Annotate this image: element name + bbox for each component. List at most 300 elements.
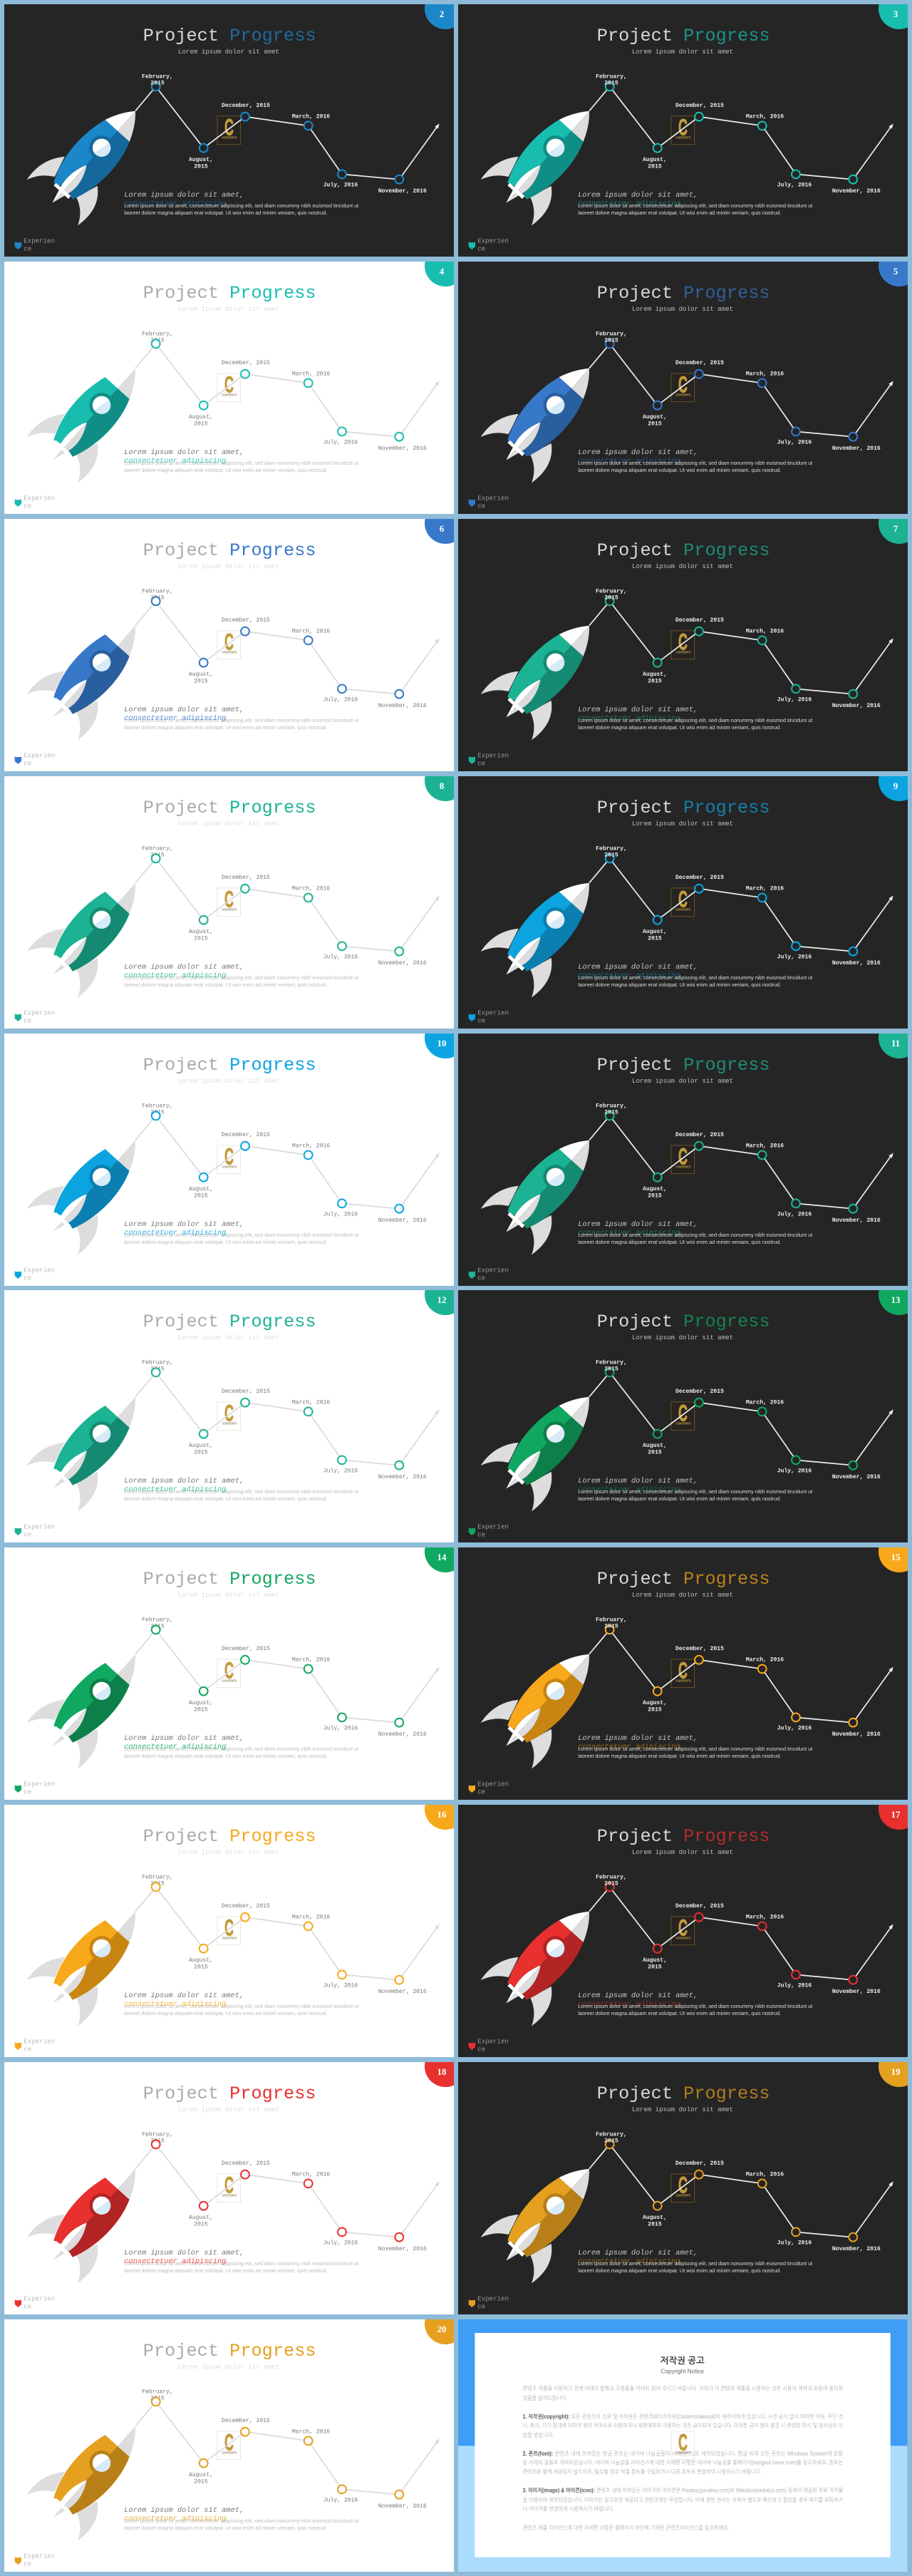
timeline labels: August,	[189, 2215, 213, 2221]
timeline labels: November, 2016	[378, 1217, 427, 1224]
watermark logo: CONTENTS	[222, 136, 237, 140]
timeline line chart	[589, 854, 893, 955]
rocket	[27, 882, 135, 997]
timeline line chart	[589, 2140, 893, 2241]
callout text: Lorem ipsum dolor sit amet,	[124, 1992, 244, 2000]
title: Project Progress	[597, 26, 770, 46]
timeline labels: August,	[643, 1443, 667, 1449]
watermark logo: C	[224, 886, 234, 912]
timeline labels: February,	[596, 331, 627, 338]
timeline labels: March, 2016	[746, 114, 784, 120]
watermark logo: C	[678, 2429, 688, 2455]
callout text: laoreet dolore magna aliquam erat volutpat. Ut wisi enim ad minim veniam, quis nostrud.	[579, 983, 782, 988]
subtitle: Lorem ipsum dolor sit amet	[632, 305, 733, 313]
timeline labels: February,	[596, 1103, 627, 1109]
rocket	[27, 1654, 135, 1768]
callout text	[124, 1734, 358, 1759]
callout text	[124, 1992, 358, 2016]
footer label	[24, 1781, 55, 1796]
callout text: Lorem ipsum dolor sit amet,	[124, 2505, 244, 2514]
timeline labels: March, 2016	[292, 1914, 330, 1920]
watermark logo: C	[224, 2172, 234, 2198]
callout text: consectetuer adipiscing	[579, 200, 680, 208]
subtitle: Lorem ipsum dolor sit amet	[632, 820, 733, 828]
timeline labels: December, 2015	[222, 1903, 270, 1910]
timeline labels: November, 2016	[378, 445, 427, 452]
callout text	[124, 1477, 358, 1502]
watermark logo: CONTENTS	[676, 136, 691, 140]
callout text: Lorem ipsum dolor sit amet,	[579, 1220, 698, 1228]
callout text: consectetuer adipiscing	[579, 457, 680, 465]
page badge: 2	[440, 9, 444, 19]
footer label: ce	[478, 759, 486, 767]
notice section 1	[523, 2413, 844, 2438]
timeline labels: July, 2016	[777, 1983, 812, 1989]
timeline labels: November, 2016	[832, 445, 881, 452]
timeline labels: February,	[596, 2131, 627, 2138]
page badge	[879, 0, 912, 29]
icon: shield	[15, 2299, 21, 2307]
timeline line chart	[589, 1369, 893, 1470]
icon: shield	[15, 1786, 21, 1793]
timeline labels	[596, 74, 881, 195]
page badge	[879, 760, 912, 801]
watermark logo: C	[224, 1915, 234, 1941]
timeline labels: August,	[643, 414, 667, 421]
timeline labels: December, 2015	[222, 1646, 270, 1652]
timeline line chart	[135, 1626, 440, 1727]
footer label: Experien	[24, 2552, 55, 2560]
page badge	[425, 1531, 466, 1572]
footer label	[24, 2552, 55, 2567]
footer label	[478, 1266, 509, 1282]
timeline line chart	[589, 1111, 893, 1212]
callout text: consectetuer adipiscing	[124, 457, 226, 465]
watermark logo	[671, 1658, 695, 1688]
timeline labels: July, 2016	[323, 1211, 358, 1217]
title: Project Progress	[143, 540, 316, 561]
timeline labels: 2015	[605, 2138, 618, 2144]
timeline line chart	[589, 340, 893, 441]
icon: shield	[15, 500, 21, 507]
footer label	[478, 1523, 509, 1539]
callout text: consectetuer adipiscing	[124, 1229, 226, 1237]
notice section 2: 2. 폰트(font): 콘텐츠 내에 쓰여있는 한글 폰트는 네이버 나눔글꼴의 서체(폰트)로 제작되었습니다. 한글 외의 모든 폰트는 Windows System에 포함	[523, 2450, 844, 2456]
timeline labels: February,	[142, 589, 173, 595]
callout text: Lorem ipsum dolor sit amet, consectetuer adipiscing elit, sed diam nonummy nibh euismod tincidunt ut	[579, 204, 813, 209]
watermark logo: CONTENTS	[222, 650, 237, 654]
page badge: 3	[893, 9, 898, 19]
timeline labels: December, 2015	[675, 1646, 724, 1652]
rocket	[481, 1140, 589, 1254]
timeline labels: August,	[189, 414, 213, 421]
watermark logo	[671, 2172, 695, 2202]
callout text	[579, 1477, 813, 1502]
timeline labels: December, 2015	[675, 617, 724, 624]
timeline labels: December, 2015	[222, 360, 270, 366]
callout text: consectetuer adipiscing	[579, 1229, 680, 1237]
callout text: consectetuer adipiscing	[124, 200, 226, 208]
icon: shield	[469, 500, 475, 507]
page badge	[425, 1788, 466, 1830]
timeline labels: February,	[142, 2389, 173, 2395]
footer label: ce	[24, 2560, 31, 2567]
panel: copyright notice	[458, 2319, 908, 2572]
subtitle: Lorem ipsum dolor sit amet	[178, 1848, 279, 1856]
page badge: 18	[437, 2066, 447, 2077]
callout text	[579, 706, 813, 731]
timeline labels: August,	[189, 1957, 213, 1964]
timeline line chart	[135, 2397, 440, 2498]
timeline labels: February,	[142, 1103, 173, 1109]
timeline labels: 2015	[194, 1964, 208, 1970]
rocket	[481, 882, 589, 997]
timeline labels	[142, 2389, 427, 2510]
footer label	[478, 751, 509, 767]
timeline labels: July, 2016	[777, 1468, 812, 1475]
timeline labels: 2015	[648, 678, 662, 684]
subtitle: Lorem ipsum dolor sit amet	[178, 820, 279, 828]
watermark logo: C	[678, 2172, 688, 2198]
timeline labels	[142, 1875, 427, 1995]
timeline labels: August,	[189, 2472, 213, 2478]
timeline labels: 2015	[605, 1109, 618, 1116]
callout text: Lorem ipsum dolor sit amet,	[124, 2249, 244, 2257]
footer label	[24, 1523, 55, 1539]
timeline line chart	[589, 83, 893, 184]
watermark logo	[671, 372, 695, 402]
subtitle: Lorem ipsum dolor sit amet	[178, 1591, 279, 1599]
timeline labels: 2015	[194, 1192, 208, 1199]
watermark logo: CONTENTS	[676, 1165, 691, 1168]
timeline labels: November, 2016	[832, 703, 881, 709]
timeline labels: March, 2016	[292, 371, 330, 377]
title: Project Progress	[597, 1054, 770, 1075]
callout text: Lorem ipsum dolor sit amet,	[579, 1992, 698, 2000]
footer label: Experien	[24, 1781, 55, 1788]
timeline line chart	[135, 1369, 440, 1470]
timeline labels: 2015	[605, 81, 618, 87]
notice section 2: 된 서체의 글꼴로 제작되었습니다. 네이버 나눔글꼴 라이선스에 대한 자세한 사항은 네이버 나눔글꼴 홈페이지(hangeul.naver.com)를 참조하세요. 폰트는	[523, 2459, 844, 2466]
footer label	[24, 1266, 55, 1282]
callout text: laoreet dolore magna aliquam erat volutpat. Ut wisi enim ad minim veniam, quis nostrud.	[124, 2011, 327, 2016]
callout text: Lorem ipsum dolor sit amet, consectetuer adipiscing elit, sed diam nonummy nibh euismod tincidunt ut	[124, 1747, 358, 1752]
callout text: Lorem ipsum dolor sit amet,	[124, 1220, 244, 1228]
callout text: Lorem ipsum dolor sit amet, consectetuer adipiscing elit, sed diam nonummy nibh euismod tincidunt ut	[124, 2004, 358, 2009]
timeline labels: February,	[596, 845, 627, 852]
callout text	[579, 1220, 813, 1245]
callout text: laoreet dolore magna aliquam erat volutpat. Ut wisi enim ad minim veniam, quis nostrud.	[124, 468, 327, 473]
callout text	[579, 448, 813, 473]
notice title: Copyright Notice	[661, 2368, 705, 2374]
timeline labels: 2015	[648, 1450, 662, 1456]
callout text: laoreet dolore magna aliquam erat volutpat. Ut wisi enim ad minim veniam, quis nostrud.	[124, 1754, 327, 1759]
callout text: consectetuer adipiscing	[124, 714, 226, 723]
timeline labels: 2015	[194, 164, 208, 170]
footer label: Experien	[24, 2037, 55, 2045]
page badge: 20	[437, 2323, 446, 2334]
panel: slide 16	[4, 1805, 453, 2057]
timeline labels: February,	[142, 845, 173, 852]
rocket	[27, 626, 135, 740]
timeline labels: February,	[596, 1875, 627, 1881]
callout text: laoreet dolore magna aliquam erat volutpat. Ut wisi enim ad minim veniam, quis nostrud.	[579, 1754, 782, 1759]
timeline labels	[596, 1360, 881, 1480]
callout text	[579, 191, 813, 216]
rocket	[27, 369, 135, 483]
footer label: ce	[478, 1531, 486, 1539]
panel: slide 11	[458, 1034, 908, 1286]
page badge	[425, 245, 466, 287]
timeline labels: November, 2016	[378, 2246, 427, 2252]
panel: slide 12	[4, 1290, 453, 1542]
icon: shield	[469, 2042, 475, 2050]
watermark logo	[217, 629, 241, 659]
page badge: 16	[437, 1809, 447, 1820]
watermark logo	[671, 1915, 695, 1945]
footer label: ce	[478, 245, 486, 253]
timeline labels: July, 2016	[323, 2497, 358, 2503]
timeline labels: December, 2015	[222, 875, 270, 881]
watermark logo	[217, 372, 241, 402]
icon: shield	[469, 1271, 475, 1278]
footer label: ce	[478, 2045, 486, 2053]
timeline labels: 2015	[150, 1624, 165, 1630]
watermark logo: CONTENTS	[676, 650, 691, 654]
callout text: Lorem ipsum dolor sit amet,	[124, 963, 244, 972]
timeline labels: July, 2016	[323, 182, 358, 189]
callout text: laoreet dolore magna aliquam erat volutpat. Ut wisi enim ad minim veniam, quis nostrud.	[579, 1240, 782, 1245]
page badge	[425, 1274, 466, 1315]
footer label: ce	[24, 1274, 31, 1282]
rocket	[481, 626, 589, 740]
icon: shield	[469, 1014, 475, 1021]
title: Project Progress	[143, 2340, 316, 2361]
rocket	[27, 1912, 135, 2026]
page badge: 17	[891, 1809, 901, 1820]
callout text: Lorem ipsum dolor sit amet,	[579, 448, 698, 457]
page badge	[879, 1788, 912, 1830]
watermark logo	[217, 1143, 241, 1173]
footer label: ce	[478, 1016, 486, 1024]
timeline labels: March, 2016	[746, 628, 784, 634]
callout text: Lorem ipsum dolor sit amet, consectetuer adipiscing elit, sed diam nonummy nibh euismod tincidunt ut	[579, 1747, 813, 1752]
page badge: 4	[440, 266, 445, 277]
callout text: Lorem ipsum dolor sit amet,	[124, 1477, 244, 1485]
notice closing line: 콘텐츠 제품 라이선스에 대한 자세한 사항은 홈페이지 하단에 기재된 콘텐츠라이선스를 참조하세요.	[523, 2524, 730, 2530]
panel: slide 6	[4, 519, 453, 771]
timeline labels: February,	[142, 1875, 173, 1881]
callout text: laoreet dolore magna aliquam erat volutpat. Ut wisi enim ad minim veniam, quis nostrud.	[124, 211, 327, 216]
callout text: consectetuer adipiscing	[124, 2515, 226, 2523]
icon: shield	[15, 2557, 21, 2564]
footer label: ce	[478, 503, 486, 510]
callout text: consectetuer adipiscing	[579, 2000, 680, 2009]
page badge: 6	[440, 523, 445, 534]
rocket	[481, 1912, 589, 2026]
watermark logo: CONTENTS	[222, 2193, 237, 2197]
subtitle: Lorem ipsum dolor sit amet	[632, 1076, 733, 1084]
notice intro: 셨음을 알려드립니다.	[523, 2394, 568, 2401]
subtitle: Lorem ipsum dolor sit amet	[178, 1076, 279, 1084]
timeline labels: February,	[142, 1617, 173, 1624]
watermark logo	[671, 115, 695, 145]
watermark logo: CONTENTS	[222, 1422, 237, 1426]
callout text	[124, 963, 358, 988]
timeline labels: November, 2016	[832, 1217, 881, 1224]
watermark logo	[217, 1658, 241, 1688]
timeline labels: November, 2016	[378, 2503, 427, 2510]
callout text: consectetuer adipiscing	[579, 714, 680, 723]
callout text: Lorem ipsum dolor sit amet,	[579, 963, 698, 972]
watermark logo	[217, 1915, 241, 1945]
timeline labels: August,	[189, 1186, 213, 1192]
callout text: laoreet dolore magna aliquam erat volutpat. Ut wisi enim ad minim veniam, quis nostrud.	[579, 1497, 782, 1502]
icon: shield	[15, 242, 21, 249]
timeline line chart	[589, 1626, 893, 1727]
callout text: Lorem ipsum dolor sit amet,	[579, 191, 698, 200]
footer label: ce	[478, 2302, 486, 2310]
timeline labels: July, 2016	[323, 2240, 358, 2246]
timeline line chart	[589, 597, 893, 698]
timeline labels: November, 2016	[378, 1474, 427, 1480]
timeline labels: February,	[142, 74, 173, 81]
page badge: 12	[437, 1294, 446, 1305]
timeline labels: 2015	[648, 1192, 662, 1199]
callout text: laoreet dolore magna aliquam erat volutpat. Ut wisi enim ad minim veniam, quis nostrud.	[124, 726, 327, 731]
timeline labels: 2015	[648, 2221, 662, 2227]
timeline labels: December, 2015	[222, 2418, 270, 2424]
timeline line chart	[135, 1111, 440, 1212]
timeline labels: 2015	[605, 1624, 618, 1630]
watermark logo: C	[678, 1143, 688, 1169]
callout text: Lorem ipsum dolor sit amet, consectetuer adipiscing elit, sed diam nonummy nibh euismod tincidunt ut	[124, 461, 358, 466]
page badge: 15	[891, 1552, 901, 1562]
timeline labels	[142, 1617, 427, 1738]
watermark logo: C	[224, 1143, 234, 1169]
timeline labels: July, 2016	[777, 697, 812, 704]
rocket	[481, 369, 589, 483]
timeline labels: August,	[189, 1443, 213, 1449]
title: Project Progress	[143, 283, 316, 304]
page badge	[879, 2046, 912, 2087]
page badge	[879, 1274, 912, 1315]
footer label: Experien	[478, 1266, 509, 1274]
timeline labels	[596, 2131, 881, 2252]
callout text: Lorem ipsum dolor sit amet, consectetuer adipiscing elit, sed diam nonummy nibh euismod tincidunt ut	[579, 718, 813, 723]
timeline labels: March, 2016	[746, 1657, 784, 1663]
page badge: 13	[891, 1294, 901, 1305]
callout text: Lorem ipsum dolor sit amet, consectetuer adipiscing elit, sed diam nonummy nibh euismod tincidunt ut	[579, 976, 813, 981]
timeline labels: February,	[142, 1360, 173, 1366]
timeline line chart	[589, 1882, 893, 1984]
callout text: Lorem ipsum dolor sit amet,	[579, 1477, 698, 1485]
panel: slide 7	[458, 519, 908, 771]
panel: slide 15	[458, 1547, 908, 1800]
subtitle: Lorem ipsum dolor sit amet	[632, 1591, 733, 1599]
timeline labels: December, 2015	[222, 1389, 270, 1395]
icon: shield	[15, 756, 21, 764]
timeline labels: November, 2016	[832, 1474, 881, 1480]
watermark logo	[217, 1401, 241, 1431]
page badge	[425, 503, 466, 544]
callout text: laoreet dolore magna aliquam erat volutpat. Ut wisi enim ad minim veniam, quis nostrud.	[124, 2525, 327, 2530]
page badge: 10	[437, 1037, 446, 1048]
footer label: Experien	[24, 237, 55, 245]
callout text: consectetuer adipiscing	[124, 2000, 226, 2009]
timeline labels: July, 2016	[323, 440, 358, 446]
timeline labels: November, 2016	[832, 1989, 881, 1995]
callout text: consectetuer adipiscing	[124, 1485, 226, 1494]
timeline labels: July, 2016	[323, 697, 358, 704]
page badge	[879, 245, 912, 287]
callout text: consectetuer adipiscing	[579, 972, 680, 980]
timeline labels: 2015	[150, 1109, 165, 1116]
timeline labels: 2015	[150, 2138, 165, 2144]
callout text: Lorem ipsum dolor sit amet,	[124, 706, 244, 714]
timeline line chart	[135, 854, 440, 955]
page badge	[879, 503, 912, 544]
timeline labels: July, 2016	[323, 1983, 358, 1989]
title: Project Progress	[597, 1312, 770, 1332]
timeline labels	[142, 845, 427, 967]
title: Project Progress	[597, 1826, 770, 1847]
callout text: Lorem ipsum dolor sit amet, consectetuer adipiscing elit, sed diam nonummy nibh euismod tincidunt ut	[124, 204, 358, 209]
footer label	[478, 1009, 509, 1024]
page badge: 14	[437, 1552, 447, 1562]
timeline labels: March, 2016	[292, 2171, 330, 2178]
notice title: 저작권 공고	[660, 2355, 705, 2365]
timeline labels: December, 2015	[222, 2160, 270, 2167]
page badge	[425, 0, 466, 29]
title: Project Progress	[143, 798, 316, 818]
callout text: consectetuer adipiscing	[579, 1743, 680, 1751]
page badge	[425, 1017, 466, 1058]
timeline labels: December, 2015	[675, 360, 724, 366]
timeline labels: July, 2016	[777, 440, 812, 446]
title: Project Progress	[597, 798, 770, 818]
footer label: ce	[24, 503, 31, 510]
footer label: Experien	[478, 2294, 509, 2302]
timeline labels: March, 2016	[292, 1657, 330, 1663]
title: Project Progress	[143, 1569, 316, 1590]
footer label	[478, 2037, 509, 2053]
timeline labels: 2015	[605, 1881, 618, 1887]
callout text: consectetuer adipiscing	[124, 972, 226, 980]
page badge: 8	[440, 780, 445, 791]
timeline labels: 2015	[605, 1366, 618, 1373]
rocket	[27, 2168, 135, 2283]
footer label	[478, 495, 509, 510]
footer label: Experien	[478, 1523, 509, 1531]
timeline labels: 2015	[194, 678, 208, 684]
panel: slide 20	[4, 2319, 453, 2572]
timeline labels: 2015	[150, 81, 165, 87]
timeline labels	[596, 331, 881, 452]
footer label	[24, 2294, 55, 2310]
panel: slide 13	[458, 1290, 908, 1542]
timeline labels: 2015	[648, 1964, 662, 1970]
timeline labels	[142, 2131, 427, 2252]
panel: slide 14	[4, 1547, 453, 1800]
panel: slide 4	[4, 262, 453, 514]
page badge	[425, 2303, 466, 2344]
footer label: ce	[478, 1788, 486, 1796]
watermark logo: CONTENTS	[676, 907, 691, 911]
footer label: Experien	[478, 1781, 509, 1788]
watermark logo: C	[224, 629, 234, 655]
callout text	[124, 448, 358, 473]
